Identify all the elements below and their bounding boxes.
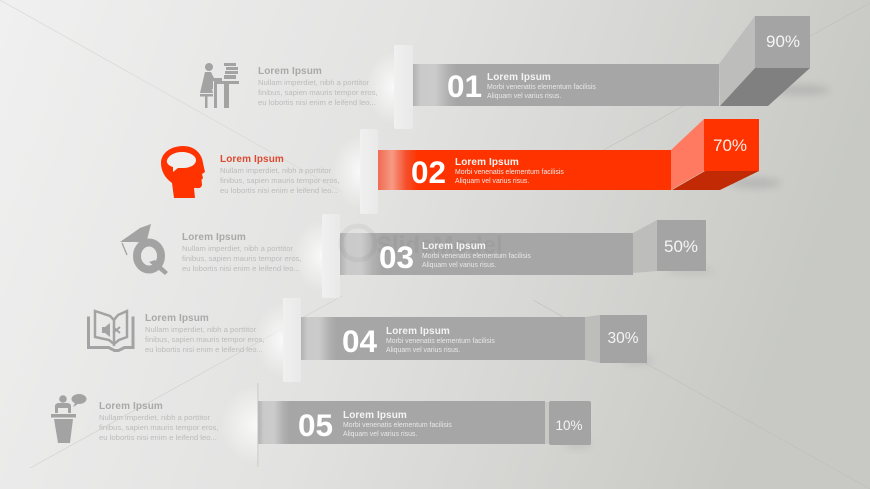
description (220, 154, 340, 195)
shadow (563, 442, 593, 448)
row 5: 10% (51, 383, 593, 467)
percent block: 30% (607, 330, 639, 347)
description: eu lobortis nisi enim e leifend leo... (99, 433, 217, 442)
fold tab (366, 45, 413, 129)
description: finibus, sapien mauris tempor eros, (145, 335, 265, 344)
ribbon highlight (301, 317, 337, 360)
shadow (729, 178, 781, 188)
shadow (665, 268, 715, 274)
shadow (770, 85, 830, 95)
description: Lorem Ipsum (145, 313, 209, 324)
percent block: 50% (664, 237, 698, 256)
3D side face (671, 119, 704, 190)
ribbon bar (378, 150, 671, 190)
percent block (755, 16, 810, 68)
bar text: Morbi venenatis elementum facilisis (422, 253, 531, 260)
bar text: Lorem Ipsum (343, 410, 407, 421)
bar text: Aliquam vel varius risus. (422, 262, 496, 269)
description: Nullam imperdiet, nibh a porttitor (99, 413, 211, 422)
percent block: 90% (766, 32, 800, 51)
description: Lorem Ipsum (182, 232, 246, 243)
fold tab (294, 214, 340, 298)
description: finibus, sapien mauris tempor eros, (182, 254, 302, 263)
bar text: Aliquam vel varius risus. (343, 431, 417, 438)
ribbon highlight (378, 150, 418, 190)
ribbon bar (258, 401, 545, 444)
percent block (549, 401, 591, 445)
ribbon bar (340, 233, 633, 275)
bar text: Morbi venenatis elementum facilisis (455, 169, 564, 176)
bar text: Morbi venenatis elementum facilisis (386, 338, 495, 345)
description: eu lobortis nisi enim e leifend leo... (258, 98, 376, 107)
description: Nullam imperdiet, nibh a porttitor (182, 244, 294, 253)
fold tab (220, 383, 258, 467)
bar text: Morbi venenatis elementum facilisis (487, 84, 596, 91)
description: Nullam imperdiet, nibh a porttitor (145, 325, 257, 334)
icon: head with speech bubble (161, 146, 205, 198)
description (145, 313, 265, 354)
description: Nullam imperdiet, nibh a porttitor (258, 78, 370, 87)
description: eu lobortis nisi enim e leifend leo... (182, 264, 300, 273)
percent block: 70% (713, 136, 747, 155)
description: Lorem Ipsum (220, 154, 284, 165)
bar text (487, 72, 596, 100)
3D underside (672, 171, 759, 190)
3D underside (720, 68, 810, 106)
bar text: Lorem Ipsum (386, 326, 450, 337)
row 2: 70% highlighted (161, 119, 781, 214)
3D side face (719, 16, 755, 106)
description (182, 232, 302, 273)
icon: graduation cap and Q (120, 224, 168, 275)
percent block: 10% (555, 418, 583, 433)
icon: speaker at podium (51, 394, 86, 443)
bar text (386, 326, 495, 354)
shadow (622, 356, 654, 364)
ribbon highlight (258, 401, 290, 444)
description (99, 401, 219, 442)
number: 02 (411, 154, 446, 190)
ribbon highlight (413, 64, 457, 106)
description: eu lobortis nisi enim e leifend leo... (220, 186, 338, 195)
fold tab (332, 129, 378, 214)
row 4: 30% (88, 298, 654, 382)
description: Nullam imperdiet, nibh a porttitor (220, 166, 332, 175)
bar text: Lorem Ipsum (487, 72, 551, 83)
number: 03 (379, 239, 414, 275)
bar text: Lorem Ipsum (455, 157, 519, 168)
description: finibus, sapien mauris tempor eros, (258, 88, 378, 97)
watermark: SlideModel (376, 232, 503, 259)
bar text: Aliquam vel varius risus. (487, 93, 561, 100)
percent block (600, 315, 647, 363)
bar text: Aliquam vel varius risus. (455, 178, 529, 185)
ribbon bar (413, 64, 719, 106)
row 1: 90% (200, 16, 830, 129)
number: 04 (342, 323, 378, 359)
description: Lorem Ipsum (99, 401, 163, 412)
description: Lorem Ipsum (258, 66, 322, 77)
ribbon bar (301, 317, 585, 360)
icon: person at desk (200, 63, 239, 108)
number: 01 (447, 68, 482, 104)
bar text: Lorem Ipsum (422, 241, 486, 252)
description: finibus, sapien mauris tempor eros, (220, 176, 340, 185)
bar text: Aliquam vel varius risus. (386, 347, 460, 354)
bar text (455, 157, 564, 185)
3D side face (633, 220, 657, 273)
icon: open book with mute symbol (88, 311, 133, 350)
number: 05 (298, 407, 333, 443)
percent block (704, 119, 759, 171)
ribbon highlight (340, 233, 382, 275)
description: eu lobortis nisi enim e leifend leo... (145, 345, 263, 354)
bar text (422, 241, 531, 269)
watermark (341, 226, 503, 260)
row 3: 50% (120, 214, 715, 298)
fold tab (255, 298, 301, 382)
description (258, 66, 378, 107)
bar text (343, 410, 452, 438)
percent block (657, 220, 706, 271)
bar text: Morbi venenatis elementum facilisis (343, 422, 452, 429)
description: finibus, sapien mauris tempor eros, (99, 423, 219, 432)
3D side face (545, 402, 549, 444)
3D side face (585, 315, 600, 363)
